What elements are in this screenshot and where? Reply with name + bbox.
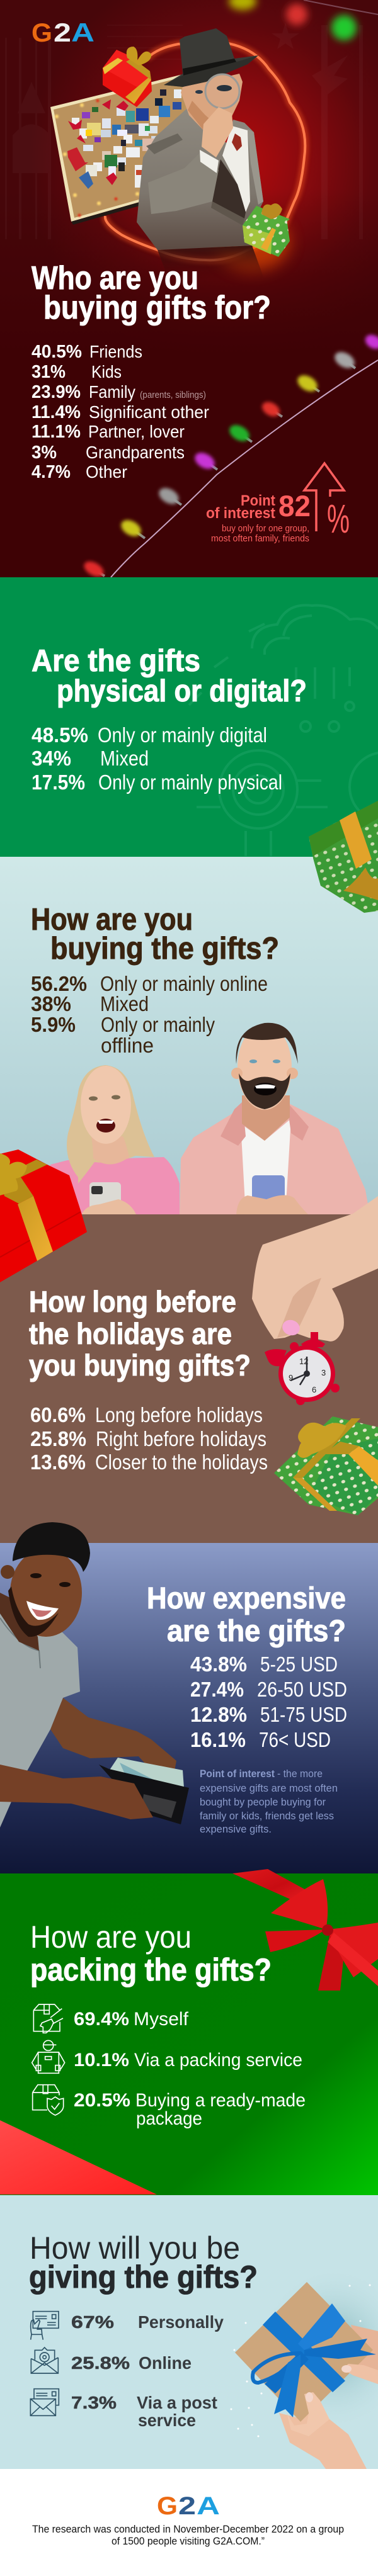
statistics list: (parents, siblings) xyxy=(140,390,206,400)
statistics list: 3% xyxy=(32,443,57,463)
photo: man with wallet xyxy=(0,1522,189,1827)
list item: packing service: Via a packing service xyxy=(134,2050,302,2070)
detective with hat and magnifying glass xyxy=(137,28,265,280)
neck xyxy=(0,1593,39,1651)
statistics list: 23.9% xyxy=(32,382,81,402)
list item: online: 25.8% xyxy=(71,2353,130,2373)
heading xyxy=(30,1919,272,1987)
statistics list xyxy=(32,342,209,482)
alarm clock: 9 xyxy=(289,1373,293,1382)
overlay: red gift between sections xyxy=(0,1150,87,1282)
faint circuit icon xyxy=(189,605,378,856)
statistics list: Family xyxy=(89,382,135,402)
statistics list: Partner, lover xyxy=(88,422,185,441)
point of interest note: expensive gifts are most often xyxy=(200,1782,338,1794)
shadow behind gift xyxy=(258,2266,378,2430)
logo: G2A: A xyxy=(197,2492,220,2520)
logo: G2A xyxy=(157,2492,220,2520)
point of interest note xyxy=(200,1768,338,1835)
statistics list: Only or mainly online xyxy=(100,972,268,995)
heading: physical or digital? xyxy=(57,674,307,708)
blue ribbon xyxy=(253,2303,376,2417)
heading: How long before xyxy=(29,1285,236,1318)
face xyxy=(181,74,243,130)
research note: The research was conducted in November-December 2022 on a group xyxy=(32,2523,344,2535)
glow under green gift xyxy=(214,214,290,271)
logo: G2A: A xyxy=(71,18,94,47)
heading: How expensive xyxy=(147,1582,346,1615)
list item: post service xyxy=(30,2389,217,2430)
shirt xyxy=(0,1613,80,1827)
point of interest note: expensive gifts. xyxy=(200,1823,272,1835)
list item: post service: 7.3% xyxy=(71,2393,117,2412)
overlay: red bow top right xyxy=(232,1869,378,1991)
heading: you buying gifts? xyxy=(29,1348,251,1382)
statistics list: Other xyxy=(86,462,127,482)
statistics list xyxy=(31,972,268,1057)
statistics list: 76< USD xyxy=(259,1728,331,1751)
statistics list xyxy=(190,1652,347,1751)
hand holding alarm clock xyxy=(252,1196,378,1405)
callout: point of interest 82%: 82 xyxy=(278,489,311,523)
research note: of 1500 people visiting G2A.COM.” xyxy=(112,2535,265,2547)
hands holding gift with blue ribbon xyxy=(235,2282,378,2469)
panel: who are you buying gifts for xyxy=(0,0,378,580)
heading: Who are you xyxy=(32,260,198,297)
alarm clock xyxy=(265,1332,340,1405)
statistics list: 25.8% xyxy=(30,1427,86,1450)
point of interest note: family or kids, friends get less xyxy=(200,1810,334,1822)
panel: giving the gifts xyxy=(0,2195,378,2469)
list item: post service: Via a post xyxy=(137,2393,217,2412)
statistics list: 38% xyxy=(31,992,71,1015)
panel background xyxy=(0,1873,378,2195)
panel background xyxy=(0,0,378,577)
callout: point of interest 82% xyxy=(206,463,350,544)
list item: ready-made package: Buying a ready-made xyxy=(135,2090,306,2111)
lower arm xyxy=(0,1765,153,1819)
green gift box ring xyxy=(243,203,290,257)
statistics list: 31% xyxy=(32,362,66,382)
statistics list: Kids xyxy=(91,362,122,381)
statistics list: 13.6% xyxy=(30,1450,86,1474)
head xyxy=(10,1549,82,1637)
heading: buying gifts for? xyxy=(43,290,271,326)
list item: ready-made package: package xyxy=(136,2108,202,2129)
alarm clock: 3 xyxy=(321,1368,326,1377)
statistics list: Only or mainly physical xyxy=(98,771,282,794)
logo: G2A xyxy=(32,18,94,47)
statistics list: Right before holidays xyxy=(96,1427,266,1450)
list item: personally: Personally xyxy=(138,2312,224,2332)
panel background xyxy=(0,1214,378,1543)
panel: how long before the holidays xyxy=(0,1196,378,1543)
heading xyxy=(29,1285,251,1382)
list item: online: Online xyxy=(139,2353,192,2373)
callout: point of interest 82%: buy only for one group, xyxy=(222,523,309,534)
arrow up xyxy=(304,463,344,531)
heading: buying the gifts? xyxy=(50,932,279,966)
statistics list: 40.5% xyxy=(32,342,82,362)
photo: man with phone xyxy=(180,1023,370,1215)
statistics list: 11.4% xyxy=(32,402,81,422)
statistics list: offline xyxy=(101,1034,154,1057)
logo: G2A: 2 xyxy=(178,2492,196,2520)
icon: hand packing box xyxy=(33,2004,63,2033)
statistics list: Long before holidays xyxy=(95,1403,263,1426)
statistics list: 43.8% xyxy=(190,1652,247,1676)
list item: ready-made package xyxy=(33,2085,306,2129)
statistics list: Friends xyxy=(89,342,142,361)
statistics list: 12.8% xyxy=(190,1703,247,1726)
list item: personally: 67% xyxy=(71,2312,114,2332)
statistics list: 26-50 USD xyxy=(257,1678,347,1701)
icon: letter and card xyxy=(30,2389,59,2415)
heading: are the gifts? xyxy=(167,1615,346,1648)
callout: point of interest 82%: most often family, friends xyxy=(211,533,309,544)
statistics list xyxy=(32,723,282,794)
list item: ready-made package: 20.5% xyxy=(74,2090,130,2111)
heading xyxy=(29,2230,258,2295)
logo: G2A: G xyxy=(157,2492,178,2520)
string lights at top xyxy=(229,0,378,40)
list item: personally xyxy=(31,2312,224,2340)
callout: point of interest 82%: of interest xyxy=(206,505,275,522)
logo: G2A: 2 xyxy=(54,18,71,47)
heading: giving the gifts? xyxy=(29,2259,258,2295)
alarm clock: 12 xyxy=(299,1357,308,1366)
statistics list: 27.4% xyxy=(190,1678,244,1701)
heading: Are the gifts xyxy=(32,644,200,678)
statistics list: 4.7% xyxy=(32,462,71,482)
statistics list: 60.6% xyxy=(30,1403,86,1426)
sparkles xyxy=(231,2284,370,2438)
statistics list: Only or mainly digital xyxy=(98,723,267,747)
statistics list xyxy=(30,1403,268,1474)
list item: packing service xyxy=(32,2040,302,2073)
icon: email envelope xyxy=(31,2347,58,2373)
heading: How will you be xyxy=(30,2230,240,2266)
alarm clock: 6 xyxy=(312,1385,316,1394)
icon: box with shield xyxy=(33,2085,64,2115)
research note xyxy=(32,2523,344,2547)
hand xyxy=(202,107,233,157)
list item: online xyxy=(31,2347,192,2373)
statistics list: Significant other xyxy=(89,402,209,422)
list item: packing service: 10.1% xyxy=(74,2050,129,2070)
list item: myself: 69.4% xyxy=(74,2009,129,2030)
heading xyxy=(32,644,307,708)
list item: myself: Myself xyxy=(134,2009,189,2030)
heading xyxy=(32,260,271,326)
photo: woman with phone xyxy=(50,1065,180,1214)
glowing ring xyxy=(105,42,305,260)
overlay: green gift between sections xyxy=(309,801,378,913)
heading: packing the gifts? xyxy=(30,1952,272,1987)
statistics list: 5-25 USD xyxy=(260,1652,338,1676)
callout: point of interest 82%: % xyxy=(327,496,350,541)
heading: How are you xyxy=(31,903,193,937)
footer background xyxy=(0,2469,378,2576)
callout: point of interest 82%: Point xyxy=(241,492,275,509)
statistics list: 48.5% xyxy=(32,723,88,747)
raised arm xyxy=(50,1698,176,1777)
icon: hand with card xyxy=(31,2312,59,2340)
panel background xyxy=(0,2195,378,2469)
statistics list: 51-75 USD xyxy=(260,1703,347,1726)
hat xyxy=(164,28,258,87)
magnifying glass xyxy=(205,74,239,108)
statistics list: Only or mainly xyxy=(101,1013,215,1036)
heading xyxy=(31,903,279,966)
statistics list: Mixed xyxy=(100,992,149,1015)
heading: the holidays are xyxy=(29,1317,232,1350)
logo: G2A: G xyxy=(32,18,52,47)
corkboard xyxy=(50,74,208,225)
icon: courier with box xyxy=(32,2040,65,2073)
panel: packing the gifts xyxy=(0,1873,378,2195)
point of interest note: bought by people buying for xyxy=(200,1796,326,1808)
red ribbon bottom left xyxy=(0,2120,157,2195)
red gift box top xyxy=(103,47,152,107)
heading: How are you xyxy=(30,1919,192,1955)
statistics list: Grandparents xyxy=(86,443,185,462)
string of lights xyxy=(81,332,378,580)
panel: physical or digital xyxy=(0,577,378,857)
panel: how expensive xyxy=(0,1522,378,1873)
statistics list: 17.5% xyxy=(32,771,85,794)
statistics list: 34% xyxy=(32,747,71,770)
heading xyxy=(147,1582,346,1648)
panel background xyxy=(0,577,378,857)
list item: post service: service xyxy=(138,2410,196,2430)
statistics list: Closer to the holidays xyxy=(95,1450,268,1474)
statistics list: 56.2% xyxy=(31,972,87,995)
statistics list: 11.1% xyxy=(32,422,81,442)
money xyxy=(109,1758,184,1788)
statistics list: 5.9% xyxy=(31,1013,76,1036)
statistics list: 16.1% xyxy=(190,1728,246,1751)
panel background xyxy=(0,857,378,1214)
panel: footer xyxy=(0,2469,378,2576)
overlay: green gift with bow xyxy=(274,1416,378,1515)
panel: how are you buying xyxy=(0,857,378,1215)
point of interest note: Point of interest xyxy=(200,1768,275,1780)
statistics list: Mixed xyxy=(100,747,149,770)
list item: myself xyxy=(33,2004,189,2033)
wallet xyxy=(99,1765,189,1824)
panel background xyxy=(0,1543,378,1873)
point of interest note: - the more xyxy=(277,1768,323,1780)
